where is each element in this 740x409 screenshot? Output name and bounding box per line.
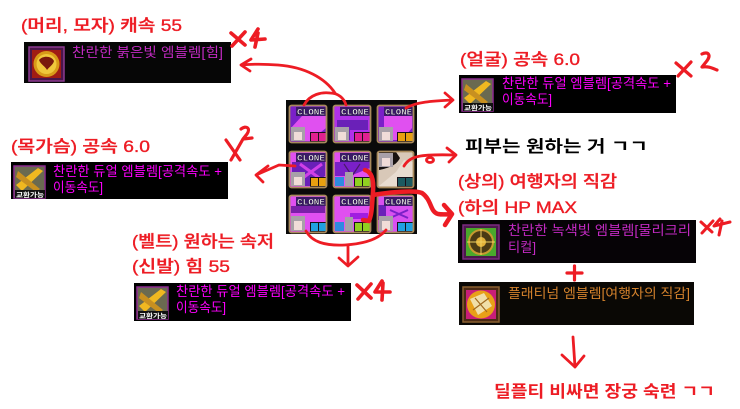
panel: dual emblem chest: 이동속도] — [53, 180, 103, 195]
panel: dual emblem shoes: 찬란한 듀얼 엠블렘[공격속도 + — [176, 284, 345, 299]
note: times 2 left — [226, 127, 252, 160]
tile: shoes: CLONE — [341, 198, 369, 208]
tile: bottoms: CLONE — [385, 198, 412, 208]
tile: chest: CLONE — [297, 154, 325, 164]
heading: shoes: (신발) 힘 55 — [132, 257, 230, 276]
panel: green emblem — [458, 220, 696, 263]
icon: plus — [567, 266, 582, 280]
note: times 4 top — [231, 29, 265, 47]
text: result note: 딜플티 비싸면 장궁 숙련 ㄱㄱ — [494, 382, 715, 401]
panel: green emblem: 티컬] — [508, 240, 536, 255]
icon: dual emblem: 교환가능 — [16, 190, 44, 199]
panel: platinum emblem: 플래티넘 엠블렘[여행자의 직감] — [508, 286, 690, 301]
panel: dual emblem face: 찬란한 듀얼 엠블렘[공격속도 + — [502, 76, 671, 91]
heading: bottoms: (하의 HP MAX — [458, 198, 577, 217]
icon: green emblem — [463, 225, 499, 259]
arrow: down to result — [562, 337, 584, 367]
icon: red emblem — [29, 47, 64, 81]
icon: dual emblem — [14, 166, 45, 199]
panel: dual emblem shoes — [134, 283, 351, 321]
panel: dual emblem face: 이동속도] — [502, 92, 552, 107]
panel: green emblem: 찬란한 녹색빛 엠블렘[물리크리 — [508, 223, 691, 238]
panel: dual emblem chest: 찬란한 듀얼 엠블렘[공격속도 + — [53, 164, 222, 179]
panel: platinum emblem — [459, 282, 694, 325]
icon: dual emblem — [137, 287, 168, 320]
tile: face: CLONE — [385, 108, 412, 118]
heading: face: (얼굴) 공속 6.0 — [460, 50, 580, 69]
arrow: face to dual emblem — [406, 93, 453, 108]
panel: dual emblem shoes: 이동속도] — [176, 300, 226, 315]
arrow: head and hat to red emblem — [241, 59, 346, 105]
tile: skin — [378, 152, 414, 188]
panel: dual emblem chest — [11, 162, 228, 199]
note: times 4 bottom — [357, 281, 390, 300]
tile: hat: CLONE — [341, 108, 369, 118]
equipment grid — [286, 100, 417, 234]
heading: head and hat: (머리, 모자) 캐속 55 — [21, 16, 182, 35]
heading: belt: (벨트) 원하는 속저 — [132, 232, 274, 251]
text: skin note: 피부는 원하는 거 ㄱㄱ — [465, 137, 648, 156]
panel: red emblem — [24, 42, 231, 83]
icon: dual emblem: 교환가능 — [464, 103, 492, 112]
tile: necklace: CLONE — [341, 154, 369, 164]
note: times 2 right — [676, 53, 717, 76]
icon: platinum emblem — [463, 287, 499, 322]
note: times 4 right — [701, 219, 730, 235]
arrow: chest to dual emblem — [256, 165, 295, 182]
panel: red emblem: 찬란한 붉은빛 엠블렘[힘] — [72, 45, 223, 60]
tile: belt: CLONE — [297, 198, 325, 208]
heading: neck and chest: (목가슴) 공속 6.0 — [11, 137, 150, 156]
arrow: belt and shoes down — [306, 230, 386, 266]
heading: top: (상의) 여행자의 직감 — [458, 172, 617, 191]
arrow: skin to note — [404, 148, 456, 166]
tile: head: CLONE — [297, 108, 325, 118]
panel: dual emblem face — [459, 75, 676, 113]
icon: dual emblem — [462, 79, 493, 112]
icon: dual emblem: 교환가능 — [139, 311, 167, 320]
arrow: necklace and shoes to green emblem — [363, 170, 452, 225]
